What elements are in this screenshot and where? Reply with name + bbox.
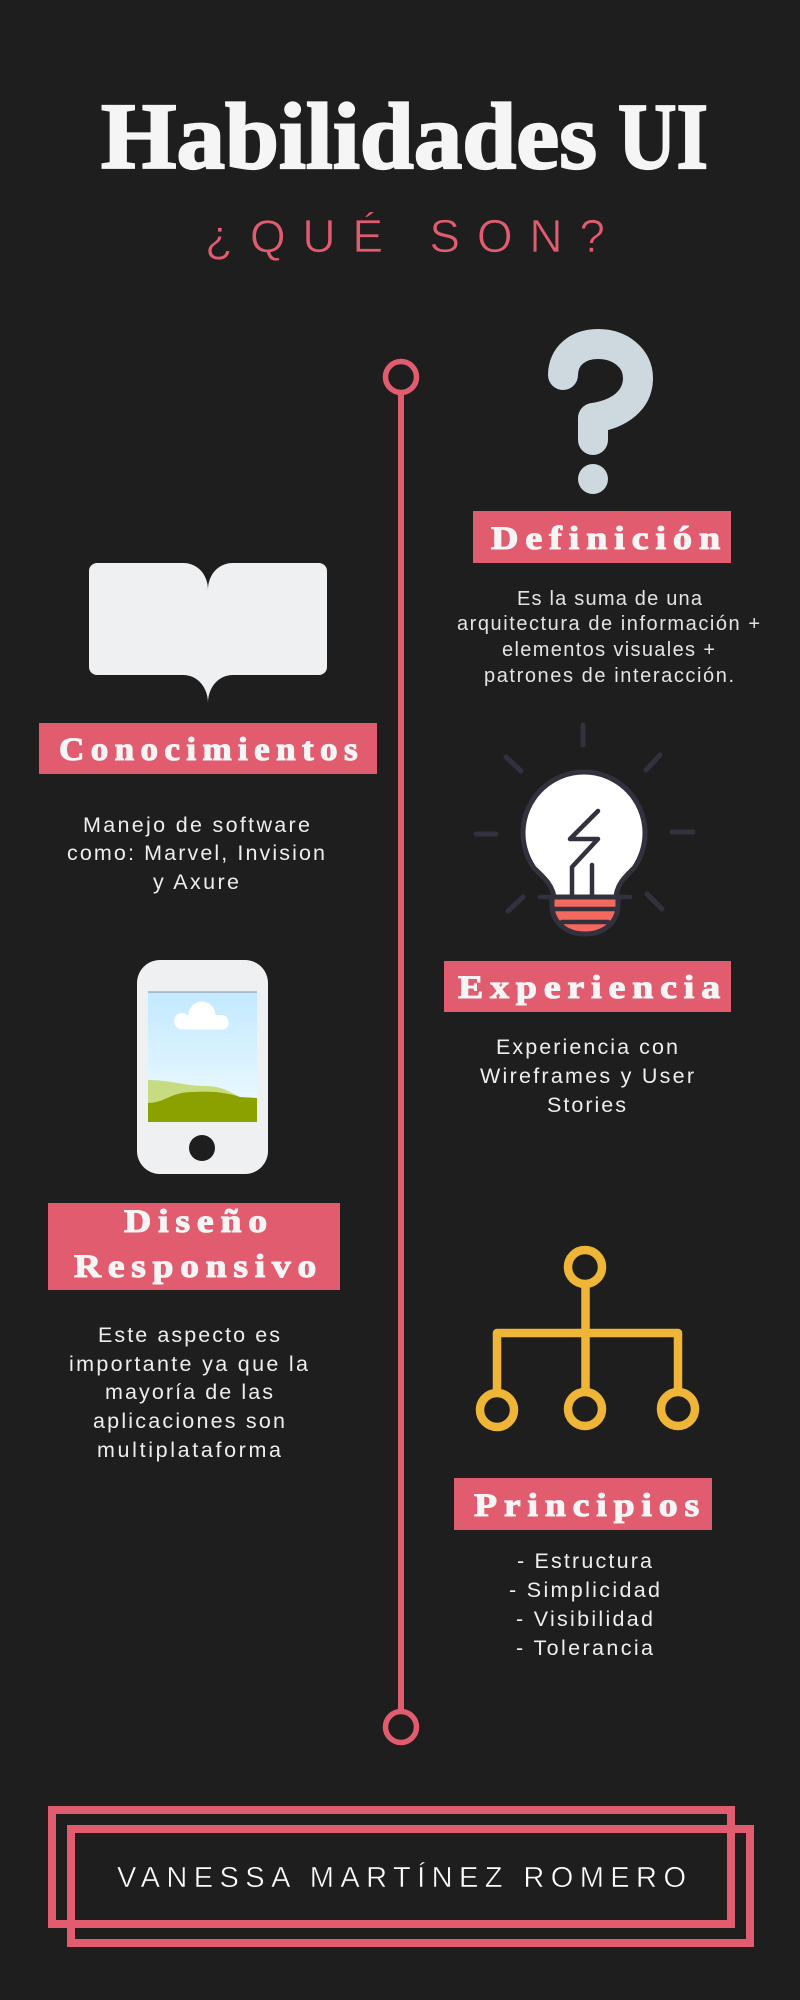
text: conocimientos: y Axure xyxy=(153,870,239,894)
heading: conocimientos xyxy=(39,723,377,774)
heading: definición: Definición xyxy=(491,521,727,557)
author name: VANESSA MARTÍNEZ ROMERO xyxy=(117,1861,686,1894)
text: experiencia: Experiencia con xyxy=(496,1035,678,1059)
text: definición: arquitectura de información + xyxy=(457,613,760,635)
text: principios xyxy=(509,1549,660,1660)
timeline xyxy=(386,362,416,1742)
text: experiencia xyxy=(480,1035,694,1117)
text: definición xyxy=(457,588,760,687)
text: diseño responsivo: importante ya que la xyxy=(69,1352,308,1376)
text: definición: elementos visuales + xyxy=(502,639,715,661)
text: diseño responsivo xyxy=(69,1323,308,1462)
text: conocimientos: Manejo de software xyxy=(83,813,310,837)
subtitle: ¿QUÉ SON? xyxy=(205,210,605,262)
text: diseño responsivo: aplicaciones son xyxy=(93,1409,285,1433)
panel: principios xyxy=(454,1250,712,1660)
icon: open book xyxy=(89,563,327,703)
panel: conocimientos xyxy=(39,563,377,894)
heading: experiencia xyxy=(444,961,731,1012)
panel: definición xyxy=(457,344,760,687)
text: principios: - Estructura xyxy=(517,1549,652,1573)
text: conocimientos xyxy=(67,813,325,894)
heading: principios xyxy=(454,1478,712,1530)
heading: experiencia: Experiencia xyxy=(458,970,727,1006)
text: definición: patrones de interacción. xyxy=(484,665,734,687)
text: diseño responsivo: multiplataforma xyxy=(97,1438,281,1462)
heading: diseño responsivo: Responsivo xyxy=(74,1249,323,1285)
footer: author box xyxy=(52,1810,750,1943)
icon: hierarchy diagram xyxy=(480,1250,695,1427)
heading: conocimientos: Conocimientos xyxy=(59,732,364,768)
icon: question mark xyxy=(563,344,638,494)
title: UI xyxy=(618,85,708,189)
title: Habilidades xyxy=(101,85,597,189)
icon: smartphone xyxy=(137,960,268,1174)
text: diseño responsivo: Este aspecto es xyxy=(98,1323,280,1347)
heading: diseño responsivo xyxy=(48,1203,340,1290)
heading: diseño responsivo: Diseño xyxy=(124,1204,274,1240)
text: experiencia: Stories xyxy=(547,1093,626,1117)
text: definición: Es la suma de una xyxy=(517,588,703,610)
heading: definición xyxy=(473,511,731,563)
text: conocimientos: como: Marvel, Invision xyxy=(67,841,325,865)
text: experiencia: Wireframes y User xyxy=(480,1064,694,1088)
text: principios: - Tolerancia xyxy=(516,1636,653,1660)
text: diseño responsivo: mayoría de las xyxy=(105,1380,273,1404)
heading: principios: Principios xyxy=(474,1488,706,1524)
text: principios: - Simplicidad xyxy=(509,1578,660,1602)
panel: diseño responsivo xyxy=(48,960,340,1462)
icon: light bulb xyxy=(476,725,693,934)
panel: experiencia xyxy=(444,725,731,1117)
text: principios: - Visibilidad xyxy=(516,1607,653,1631)
